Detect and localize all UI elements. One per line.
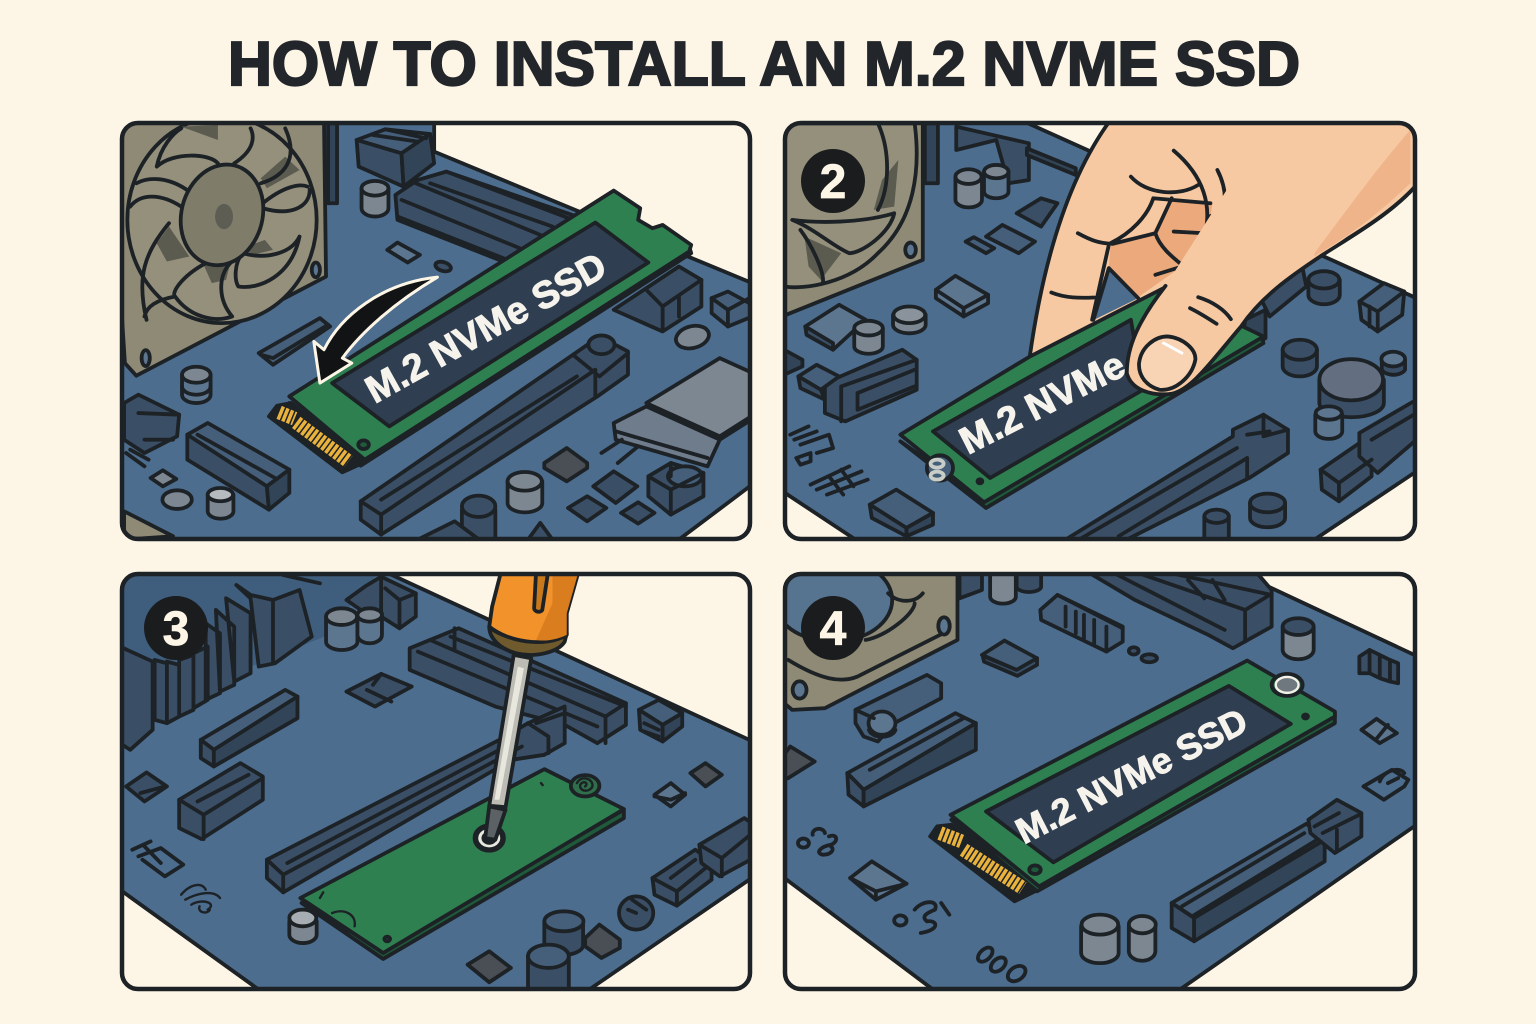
step number 3 xyxy=(144,596,208,660)
screwdriver xyxy=(485,570,579,840)
SSD label text: M.2 NVMe SSD xyxy=(1009,700,1254,852)
standoff cap xyxy=(289,910,317,943)
memory slots xyxy=(395,172,577,263)
arrow: insert direction xyxy=(314,277,437,383)
chip bottom left xyxy=(850,861,906,900)
left connector xyxy=(124,395,179,466)
connector behind thumb xyxy=(1244,308,1268,341)
step number 2: 2 xyxy=(820,156,846,209)
step number 4 xyxy=(801,596,865,660)
small chips left xyxy=(126,772,220,912)
rear connector block xyxy=(357,129,434,187)
cooling fan xyxy=(120,117,326,376)
capacitor xyxy=(362,181,388,217)
top connector and caps xyxy=(960,573,1041,604)
standoff screw xyxy=(927,455,953,481)
rear connector xyxy=(956,127,1076,183)
SSD label plate xyxy=(986,686,1291,862)
small chip xyxy=(982,641,1157,676)
solder marks xyxy=(798,829,949,933)
gold connector pins xyxy=(269,403,363,472)
capacitors bottom xyxy=(975,915,1156,984)
right connectors xyxy=(652,818,756,906)
fan corner xyxy=(774,558,957,710)
SSD flat on board xyxy=(300,769,624,959)
left slot block xyxy=(187,423,289,510)
small diamond chips xyxy=(151,448,654,524)
caps bottom xyxy=(1204,494,1285,540)
step number 4: 4 xyxy=(820,603,847,656)
capacitors top xyxy=(955,165,1008,207)
RAM slot xyxy=(1090,573,1272,648)
retaining screw xyxy=(571,775,599,796)
left chips and caps xyxy=(805,305,926,354)
small chips xyxy=(936,198,1057,316)
cooling fan xyxy=(780,120,938,316)
mounting screw xyxy=(1272,674,1303,696)
panel borders xyxy=(122,123,1415,989)
screw hole xyxy=(475,825,504,851)
traces xyxy=(790,426,868,495)
PCIe slot lower right xyxy=(1172,800,1361,941)
title: HOW TO INSTALL AN M.2 NVME SSD xyxy=(228,30,1300,99)
panel: step 1 align SSD xyxy=(120,117,756,540)
capacitors xyxy=(326,608,382,650)
right connector under SSD xyxy=(614,267,701,331)
SSD installed xyxy=(930,661,1335,901)
lower right connector xyxy=(648,463,703,515)
panel: step 2 insert SSD by hand xyxy=(780,120,1416,540)
motherboard xyxy=(780,120,1416,540)
right-side connector xyxy=(639,700,682,741)
bottom caps and chips xyxy=(468,911,620,990)
heatsink block xyxy=(601,358,756,466)
chips right xyxy=(1361,719,1408,800)
SSD label plate xyxy=(332,223,648,426)
SSD label text partly hidden: M.2 NVMe S xyxy=(953,328,1164,463)
PCIe slot xyxy=(1066,415,1288,540)
rear connector xyxy=(346,577,416,628)
motherboard xyxy=(120,120,756,540)
motherboard xyxy=(780,570,1416,990)
small connector xyxy=(712,291,752,326)
memory module ridge xyxy=(1040,595,1123,652)
hand: fingers and palm xyxy=(1030,120,1416,357)
step number 3: 3 xyxy=(163,603,189,656)
gold connector pins xyxy=(930,825,1035,901)
PCIe slot xyxy=(361,335,628,535)
SSD board xyxy=(269,191,691,472)
small rounded chips xyxy=(619,763,722,930)
SSD label text: M.2 NVMe SSD xyxy=(359,245,614,412)
right side components xyxy=(1283,271,1416,501)
capacitor right xyxy=(1283,618,1314,659)
capacitors xyxy=(182,367,542,540)
hand: thumb xyxy=(1127,120,1416,394)
small chips xyxy=(259,243,453,365)
left latch slots xyxy=(847,675,976,806)
panel: step 4 finished install xyxy=(774,558,1416,990)
SSD board in hand xyxy=(900,288,1263,508)
small chip xyxy=(346,674,412,707)
latch slot xyxy=(798,350,917,421)
long slot xyxy=(267,707,565,892)
heatsink small xyxy=(1359,650,1398,683)
heatsink fins xyxy=(120,575,320,750)
panel: step 3 fasten screw xyxy=(120,570,756,990)
chip bottom xyxy=(870,490,933,536)
motherboard xyxy=(120,570,756,990)
RAM slots xyxy=(410,628,626,743)
step number 2 xyxy=(801,149,865,213)
PCIe slots left xyxy=(179,690,297,839)
